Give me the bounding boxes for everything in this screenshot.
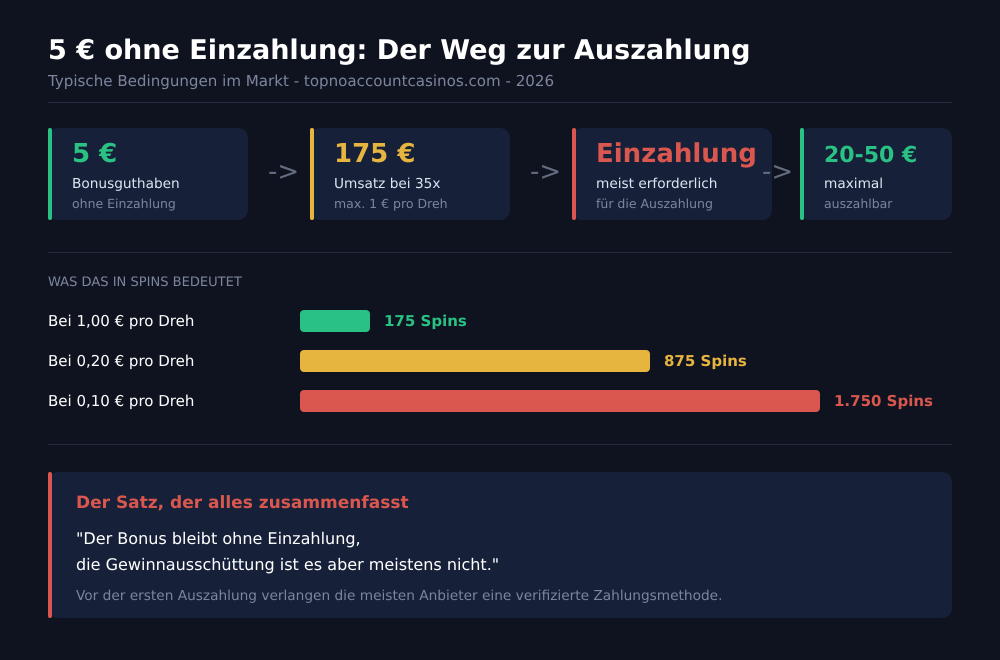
card value: 20-50 € bbox=[824, 143, 917, 168]
callout quote bbox=[76, 529, 499, 574]
callout quote: "Der Bonus bleibt ohne Einzahlung, bbox=[76, 529, 361, 548]
card note: max. 1 € pro Dreh bbox=[334, 196, 448, 211]
row: 0,10 euro: 1.750 Spins bbox=[834, 392, 933, 410]
row: 1,00 euro: 175 Spins bbox=[384, 312, 467, 330]
arrow 2: -> bbox=[530, 157, 561, 187]
card note: ohne Einzahlung bbox=[72, 196, 176, 211]
card label: meist erforderlich bbox=[596, 176, 717, 192]
panel: summary callout bbox=[48, 472, 952, 618]
subtitle: Typische Bedingungen im Markt - topnoaccountcasinos.com - 2026 bbox=[47, 72, 554, 90]
bar chart bbox=[48, 310, 933, 412]
panel: wagering card bbox=[310, 128, 510, 220]
panel: bonus card bbox=[48, 128, 248, 220]
row: 0,20 euro: Bei 0,20 € pro Dreh bbox=[48, 352, 194, 370]
panel: payout card bbox=[800, 128, 952, 220]
card note: für die Auszahlung bbox=[596, 196, 713, 211]
arrow 3: -> bbox=[762, 157, 793, 187]
callout heading: Der Satz, der alles zusammenfasst bbox=[76, 493, 409, 513]
title: 5 € ohne Einzahlung: Der Weg zur Auszahlung bbox=[48, 35, 751, 66]
row: 0,20 euro bbox=[48, 350, 747, 372]
row: 1,00 euro bbox=[48, 310, 467, 332]
arrow 1: -> bbox=[268, 157, 299, 187]
card label: Bonusguthaben bbox=[72, 176, 180, 192]
callout note: Vor der ersten Auszahlung verlangen die meisten Anbieter eine verifizierte Zahlungsmethode. bbox=[76, 588, 722, 604]
card value: 5 € bbox=[72, 139, 117, 169]
card value: 175 € bbox=[334, 139, 415, 169]
row: 0,10 euro bbox=[48, 390, 933, 412]
row: 0,20 euro: 875 Spins bbox=[664, 352, 747, 370]
panel: deposit card bbox=[572, 128, 772, 220]
card label: maximal bbox=[824, 176, 883, 192]
section heading: WAS DAS IN SPINS BEDEUTET bbox=[48, 275, 242, 290]
card value: Einzahlung bbox=[596, 139, 757, 169]
callout quote: die Gewinnausschüttung ist es aber meistens nicht." bbox=[76, 555, 499, 574]
row: 1,00 euro: Bei 1,00 € pro Dreh bbox=[48, 312, 194, 330]
row: 0,10 euro: Bei 0,10 € pro Dreh bbox=[48, 392, 194, 410]
card label: Umsatz bei 35x bbox=[334, 176, 440, 192]
card note: auszahlbar bbox=[824, 196, 893, 211]
